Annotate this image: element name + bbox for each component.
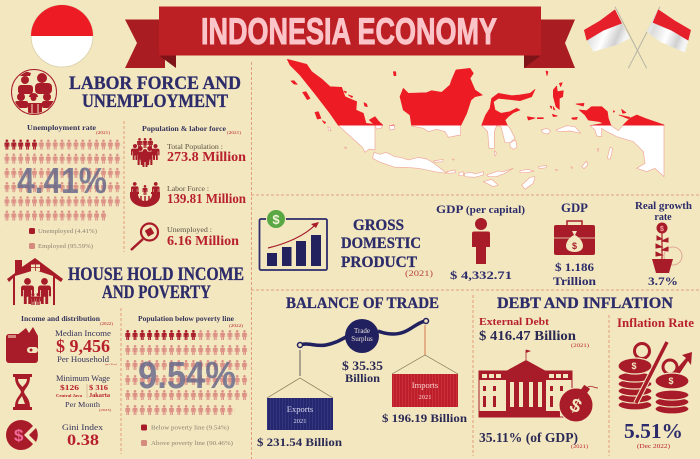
icon: briefcase with money bag: $	[572, 241, 577, 251]
trade values: Billion	[345, 371, 380, 385]
icon: percent with coin stacks: $	[668, 376, 674, 386]
panel: external debt: $ 416.47 Billion	[479, 329, 576, 344]
panel: real growth rate: rate	[654, 212, 672, 223]
heading: balance of trade: BALANCE OF TRADE	[286, 295, 439, 312]
icon: magnifier	[131, 224, 158, 250]
panel: unemployment rate: 4.41%	[17, 160, 107, 201]
panel: external debt: External Debt	[479, 316, 549, 328]
panel: population and labor force: Total Population :	[167, 144, 223, 151]
panel: population and labor force: Population & labor force	[142, 124, 227, 133]
panel: real growth rate	[635, 201, 692, 288]
exports container: Exports	[287, 404, 313, 414]
icon: money plant: $	[660, 226, 664, 233]
map of Indonesia	[287, 59, 664, 189]
heading: labor force and unemployment	[69, 74, 241, 112]
title ribbon: INDONESIA ECONOMY	[201, 11, 497, 52]
chart: trade balance scale: Trade	[354, 327, 370, 335]
icon: hourglass	[13, 374, 32, 410]
trade values: $ 196.19 Billion	[382, 411, 467, 425]
panel: income and distribution: Per Household	[57, 355, 109, 364]
heading: labor force and unemployment: UNEMPLOYMENT	[82, 92, 229, 112]
panel: income and distribution: Minimum Wage	[56, 374, 110, 383]
heading: household income and poverty: HOUSE HOLD INCOME	[68, 265, 244, 285]
title ribbon	[125, 6, 575, 68]
chart: trade balance scale: Surplus	[351, 335, 373, 343]
imports container: Imports	[412, 380, 438, 390]
panel: population below poverty line: Below poverty line (9.54%)	[151, 424, 229, 432]
panel: GDP total	[553, 200, 596, 288]
panel: GDP per capita: GDP (per capital)	[436, 204, 525, 216]
heading: gross domestic product: PRODUCT	[341, 254, 417, 271]
panel: GDP total: Trillion	[553, 274, 596, 288]
panel: income and distribution: Gini Index	[62, 422, 104, 432]
panel: unemployment rate: (2021)	[96, 130, 111, 135]
exports container	[267, 398, 333, 430]
panel: population below poverty line: 9.54%	[138, 355, 236, 397]
heading: household income and poverty: AND POVERTY	[102, 283, 212, 303]
panel: income and distribution: Income and distribution	[21, 314, 101, 323]
panel: population below poverty line	[125, 314, 249, 447]
heading: labor force and unemployment: LABOR FORCE AND	[69, 74, 241, 94]
panel: income and distribution: $126	[60, 383, 79, 392]
panel: population and labor force: 273.8 Million	[167, 149, 246, 164]
icon: labor force gear	[130, 182, 160, 207]
icon: gini pie: $	[14, 426, 24, 445]
panel: population below poverty line: Population below poverty line	[138, 314, 235, 323]
panel: population and labor force: 139.81 Million	[167, 191, 246, 206]
panel: income and distribution: Median Income	[55, 329, 111, 338]
panel: unemployment rate	[4, 123, 122, 250]
trade values	[257, 359, 467, 449]
trade values: $ 35.35	[342, 359, 383, 373]
panel: income and distribution: Central Java	[56, 393, 83, 398]
panel: real growth rate: 3.7%	[648, 274, 678, 288]
panel: real growth rate: Real growth	[635, 201, 692, 212]
panel: income and distribution: (2022)	[100, 321, 114, 326]
heading: gross domestic product	[341, 217, 433, 278]
icon: wallet	[6, 327, 38, 363]
chart: unemployment pictogram	[4, 140, 122, 225]
panel: population and labor force: Labor Force :	[167, 186, 209, 193]
icon: Indonesia round flag	[31, 5, 93, 67]
heading: gross domestic product: DOMESTIC	[341, 235, 421, 252]
panel: unemployment rate: Unemployed (4.41%)	[38, 228, 97, 235]
panel: income and distribution	[6, 314, 117, 450]
icon: percent with coin stacks	[618, 342, 692, 414]
icon: person	[472, 218, 490, 264]
panel: GDP total: GDP	[561, 200, 588, 215]
panel: GDP per capita	[436, 204, 525, 282]
panel: income and distribution: Jakarta	[89, 392, 111, 399]
imports container	[392, 374, 458, 407]
panel: population and labor force: 6.16 Million	[167, 233, 239, 248]
panel: unemployment rate: Employed (95.59%)	[38, 243, 93, 250]
icon: GDP growth chart: $	[272, 212, 280, 227]
panel: population and labor force: Unemployed :	[167, 227, 212, 234]
panel: income and distribution: 0.38	[67, 432, 99, 449]
panel: income and distribution: $ 316	[89, 383, 108, 392]
icon: labor force workers	[12, 70, 56, 115]
heading: gross domestic product: (2021)	[405, 269, 433, 278]
panel: inflation rate: Inflation Rate	[617, 316, 694, 330]
icon: percent with coin stacks: $	[631, 361, 637, 371]
chart: poverty pictogram	[125, 330, 249, 420]
icon: government building with bomb: $	[566, 395, 585, 418]
panel: external debt: (2021)	[571, 443, 588, 450]
chart: trade balance scale	[267, 318, 458, 430]
panel: GDP total: $ 1.186	[555, 260, 594, 274]
panel: external debt	[479, 316, 598, 450]
panel: population below poverty line: (2022)	[229, 323, 244, 328]
panel: population and labor force	[130, 124, 246, 250]
heading: debt and inflation: DEBT AND INFLATION	[497, 295, 673, 312]
panel: external debt: (2021)	[571, 342, 589, 349]
trade values: $ 231.54 Billion	[257, 435, 342, 449]
panel: income and distribution: Per Month	[65, 400, 100, 409]
heading: household income and poverty	[68, 265, 244, 303]
icon: crossed flags	[584, 7, 691, 68]
panel: inflation rate: 5.51%	[624, 419, 683, 443]
panel: income and distribution: $ 9,456	[56, 336, 110, 356]
exports container: 2021	[294, 418, 306, 425]
panel: population below poverty line: Above poverty line (90.46%)	[151, 440, 233, 447]
panel: income and distribution: (2023)	[99, 408, 112, 412]
panel: income and distribution: (per Year)	[105, 363, 117, 366]
panel: external debt: 35.11% (of GDP)	[479, 431, 578, 446]
icon: GDP growth chart	[260, 210, 327, 270]
heading: gross domestic product: GROSS	[353, 217, 404, 234]
icon: house with family	[7, 258, 63, 305]
imports container: 2021	[418, 394, 432, 401]
icon: crowd	[131, 138, 160, 167]
panel: unemployment rate: Unemployment rate	[27, 123, 97, 132]
panel: inflation rate: (Dec 2022)	[637, 443, 670, 450]
panel: population and labor force: (2021)	[227, 130, 242, 135]
panel: inflation rate	[617, 316, 694, 450]
panel: GDP per capita: $ 4,332.71	[450, 268, 512, 282]
